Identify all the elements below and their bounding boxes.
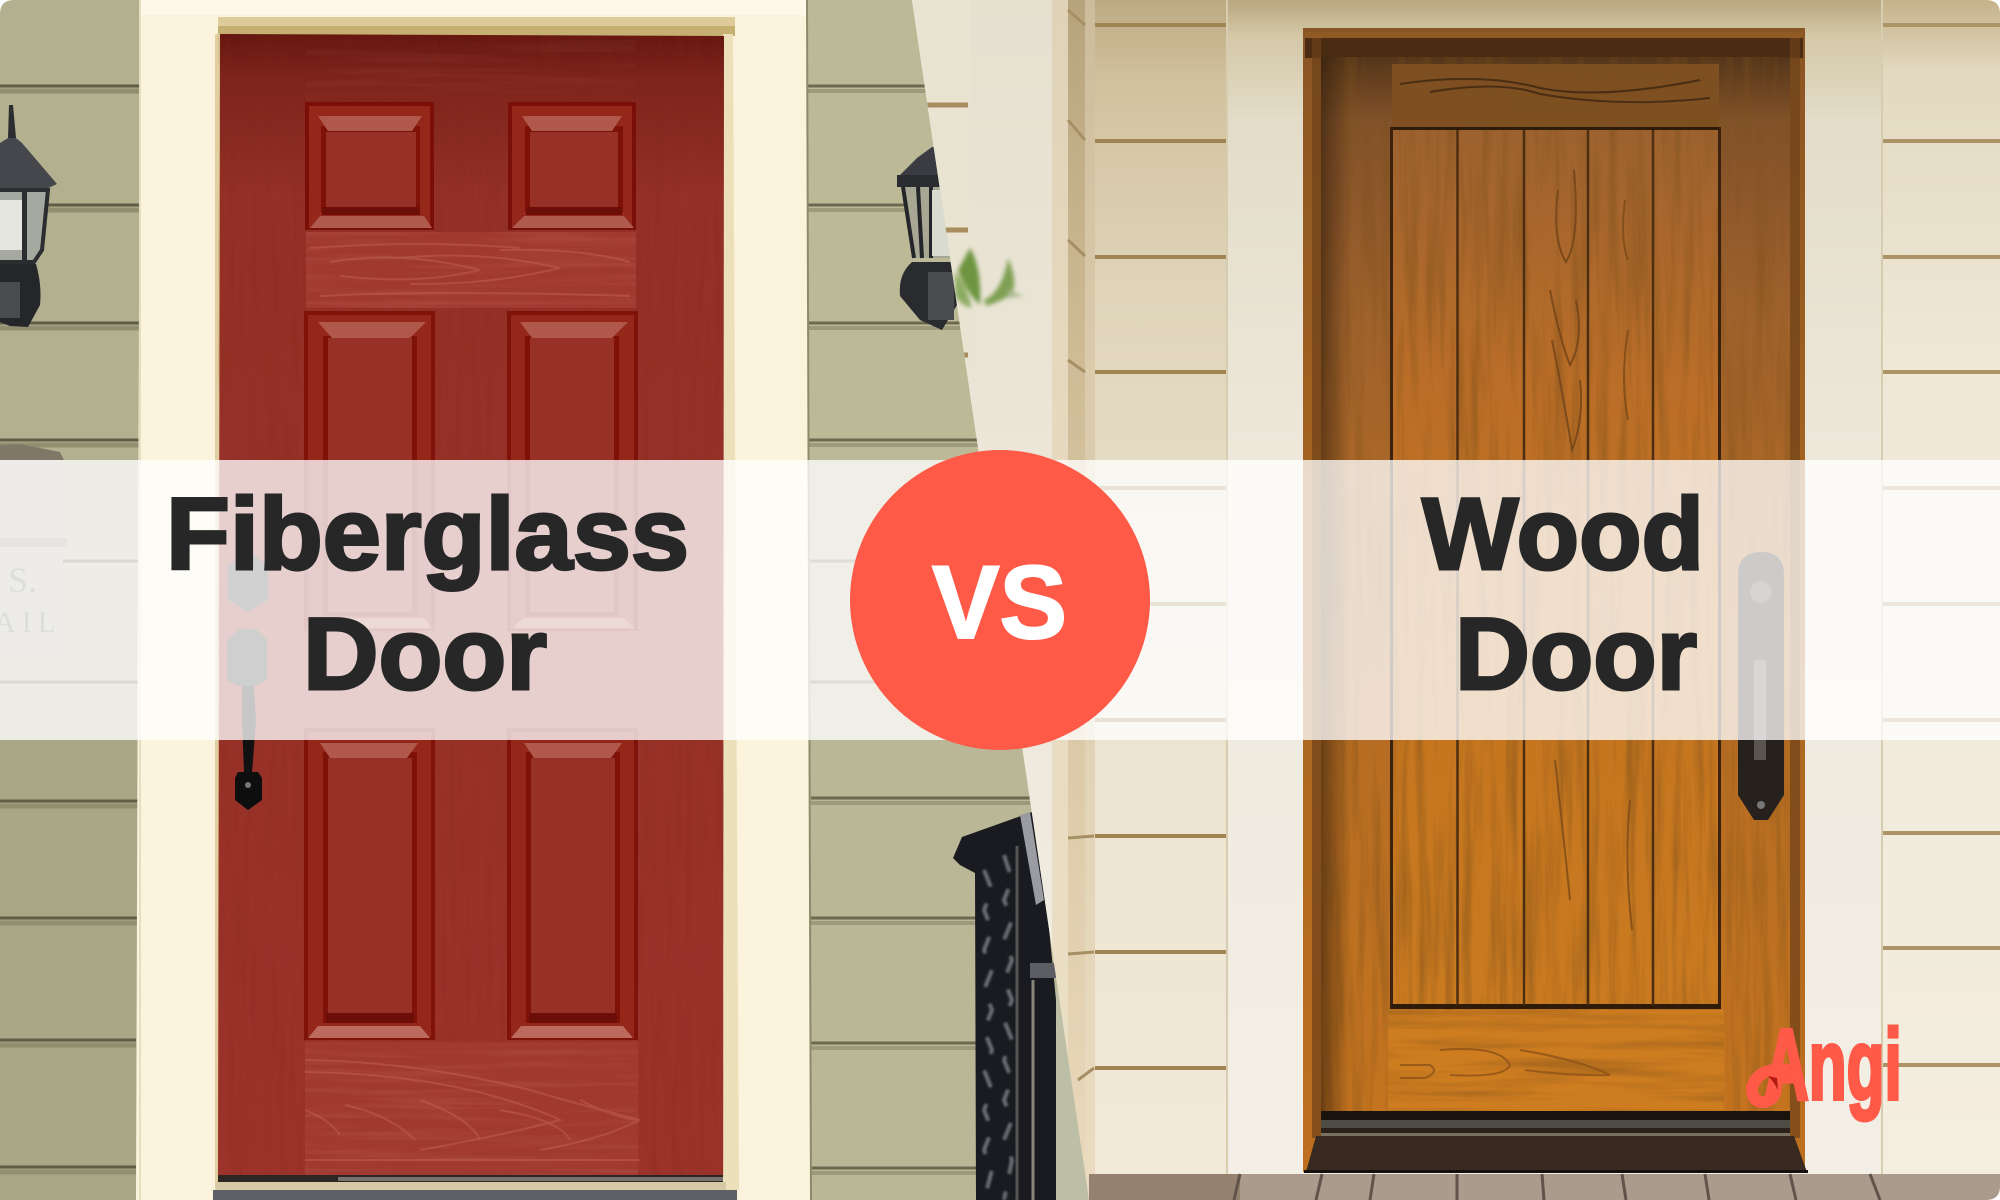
- door panel: top right: [508, 102, 636, 230]
- lamp: right wall lantern: [897, 147, 960, 330]
- top rail: [1392, 64, 1719, 127]
- lower rail: [1388, 1010, 1724, 1111]
- door panel: bottom left: [304, 728, 435, 1040]
- title: wood door: Wood: [1422, 477, 1704, 591]
- red door: [213, 34, 737, 1200]
- title: fiberglass door: Door: [303, 597, 547, 711]
- siding: left of door: [0, 0, 142, 1200]
- logo: Angi: Angi: [1764, 1009, 1902, 1121]
- door panel: top left: [305, 102, 434, 230]
- siding: right of wood door: [1882, 0, 2000, 1200]
- translucent title band: [0, 460, 2000, 740]
- title: fiberglass door: [166, 477, 689, 711]
- back wall segment: [912, 0, 970, 391]
- title: fiberglass door: Fiberglass: [166, 477, 689, 591]
- bottom rail: [305, 1042, 640, 1175]
- vs badge: VS: [932, 545, 1067, 661]
- railing: [953, 812, 1057, 1200]
- siding: left of wood door: [1095, 0, 1228, 1200]
- lock rail: [306, 232, 636, 308]
- brick walkway: [1089, 1174, 2000, 1200]
- plant leaves: [955, 248, 1024, 308]
- door handle: [227, 550, 268, 810]
- door handle: [1738, 552, 1784, 820]
- logo fold accent: [1768, 1076, 1778, 1090]
- siding: right of door: [806, 0, 1106, 1200]
- threshold: [213, 1175, 737, 1200]
- door panel: middle right: [507, 311, 638, 631]
- door casing: [136, 0, 811, 1200]
- corner shingle strip: [1052, 0, 1096, 1200]
- panel: fiberglass door photo: [0, 0, 1106, 1200]
- door panel: middle left: [304, 311, 435, 631]
- title: wood door: Door: [1455, 597, 1697, 711]
- mailbox lettering: S.: [8, 560, 37, 600]
- title: wood door: [1422, 477, 1704, 711]
- door threshold: [1304, 1111, 1808, 1173]
- mailbox: [0, 444, 67, 632]
- wood door frame: [1303, 28, 1805, 1172]
- corner column: [975, 0, 1052, 949]
- door panel: bottom right: [507, 728, 638, 1040]
- vertical plank panel: [1390, 127, 1721, 1009]
- lamp: left wall lantern: [0, 105, 57, 327]
- wood door: [1321, 57, 1790, 1111]
- vs badge: [850, 450, 1150, 750]
- logo loop on the letter A: [1752, 1069, 1790, 1102]
- panel: wood door photo: [905, 0, 2000, 1200]
- door casing: [1227, 0, 1882, 1200]
